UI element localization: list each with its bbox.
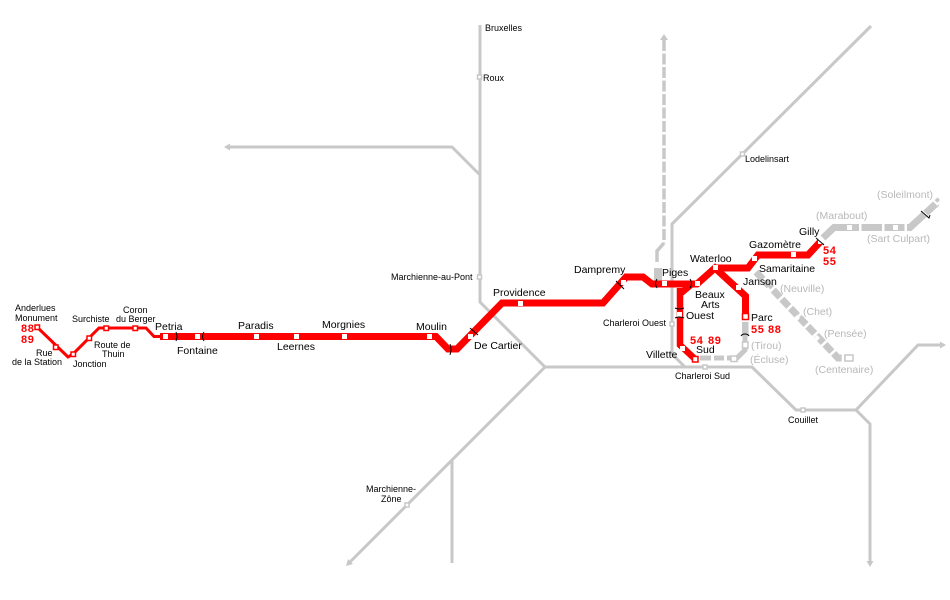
west station labels: Coron (123, 305, 148, 315)
route numbers: 88 (21, 323, 34, 335)
central station labels (646, 226, 820, 361)
route numbers: 88 (768, 324, 781, 336)
route numbers (21, 245, 837, 347)
railway network (224, 25, 946, 567)
grey planned station labels: (Pensée) (824, 328, 867, 340)
west station labels: Jonction (73, 359, 107, 369)
west station labels: Surchiste (72, 314, 110, 324)
central station labels: Samaritaine (759, 263, 815, 275)
grey railway labels: Marchienne-au-Pont (391, 272, 473, 282)
west station labels: Thuin (102, 349, 125, 359)
route numbers: 55 (751, 324, 764, 336)
central station labels: Sud (696, 344, 715, 356)
west station labels: Paradis (238, 320, 274, 332)
route numbers: 54 (823, 245, 837, 257)
grey planned station labels: (Marabout) (816, 210, 867, 222)
grey planned station labels: (Tirou) (751, 340, 782, 352)
grey planned station labels: (Neuville) (780, 283, 824, 295)
planned grey extension: north branch (654, 34, 668, 282)
planned grey extension: Centenaire (756, 272, 853, 361)
central station labels: Waterloo (690, 253, 732, 265)
grey railway labels: Zône (381, 494, 402, 504)
route numbers: 55 (823, 256, 836, 268)
central station labels: Gilly (799, 226, 820, 238)
red metro line (37, 241, 821, 359)
grey planned station labels: (Écluse) (750, 353, 789, 366)
central station labels: Janson (743, 276, 777, 288)
west station labels: Morgnies (322, 319, 365, 331)
grey planned station labels: (Soleilmont) (877, 189, 933, 201)
west station labels: Route de (94, 340, 131, 350)
central station labels: Ouest (686, 310, 714, 322)
grey railway labels: Lodelinsart (745, 154, 790, 164)
grey railway labels: Roux (483, 73, 505, 83)
west station labels: Rue (36, 348, 53, 358)
west station labels: de la Station (12, 357, 62, 367)
west station labels (12, 264, 626, 369)
grey railway labels: Charleroi Sud (675, 371, 730, 381)
route numbers: 89 (708, 335, 721, 347)
west station labels: Anderlues (15, 303, 56, 313)
route numbers: 54 (690, 335, 704, 347)
west station labels: De Cartier (474, 340, 522, 352)
grey railway labels: Marchienne- (366, 484, 416, 494)
grey railway labels: Charleroi Ouest (603, 318, 667, 328)
grey railway labels: Couillet (788, 415, 819, 425)
central station labels: Piges (662, 267, 688, 279)
west station labels: Providence (493, 287, 546, 299)
central station labels: Gazomètre (749, 239, 801, 251)
grey railway labels: Bruxelles (485, 23, 523, 33)
grey railway labels (366, 23, 819, 504)
west station labels: Fontaine (177, 345, 218, 357)
grey planned station labels (750, 189, 933, 376)
west station labels: Monument (15, 313, 58, 323)
central station labels: Villette (646, 349, 677, 361)
west station labels: du Berger (116, 314, 156, 324)
grey planned station labels: (Sart Culpart) (867, 233, 930, 245)
west station labels: Dampremy (574, 264, 626, 276)
planned grey extension: Parc to Sud loop (700, 322, 749, 363)
central station labels: Parc (751, 312, 773, 324)
route numbers: 89 (21, 334, 34, 346)
grey planned station labels: (Chet) (803, 306, 832, 318)
west station labels: Moulin (416, 321, 447, 333)
west station labels: Petria (155, 321, 183, 333)
west station labels: Leernes (277, 341, 315, 353)
grey planned station labels: (Centenaire) (815, 364, 873, 376)
station tunnel marks (176, 238, 824, 355)
planned grey extension: Soleilmont (823, 197, 943, 238)
central station labels: Arts (701, 299, 720, 311)
red line stations (35, 239, 823, 362)
central station labels: Beaux (695, 289, 726, 301)
